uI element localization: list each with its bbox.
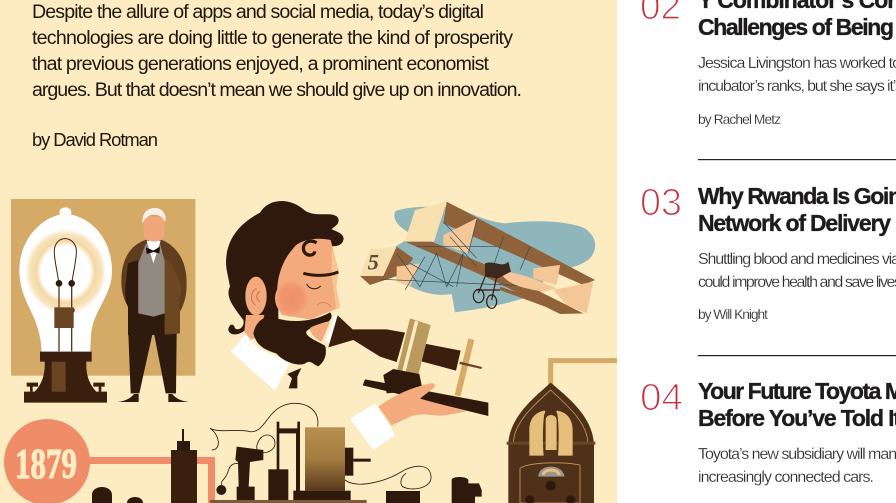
telephone drum: [397, 318, 461, 377]
headline: [698, 378, 896, 431]
Edison figure: [117, 208, 189, 402]
summary: increasingly connected cars.: [698, 469, 874, 486]
tall battery column: [171, 429, 197, 503]
undercarriage: [473, 277, 500, 308]
lightbulb base: [24, 352, 107, 403]
eye and brow: [303, 272, 338, 289]
number 03: 03: [640, 182, 682, 224]
sky cloud: [389, 207, 595, 312]
intro paragraph: [32, 1, 522, 101]
biplane: 5: [368, 249, 379, 274]
machinery: telegraph set: [210, 403, 431, 503]
top wing: [443, 202, 595, 285]
left panel background: [0, 0, 617, 503]
headline: Challenges of Being: [698, 14, 894, 40]
summary: [698, 446, 896, 486]
shirt cuff: [350, 403, 395, 450]
summary: Jessica Livingston has worked to: [698, 55, 896, 72]
intro paragraph: Despite the allure of apps and social media, today’s digital: [32, 1, 484, 23]
number 04: 04: [640, 377, 683, 419]
telephone base: [363, 369, 488, 416]
summary: could improve health and save lives: [698, 274, 896, 291]
right panel: article 02: [640, 0, 896, 127]
byline: by Will Knight: [698, 307, 768, 322]
collar: [231, 333, 290, 391]
rigging: [382, 220, 543, 290]
antique radio: [507, 383, 595, 503]
1879 date marker: 1879: [15, 442, 77, 488]
illustration: inventor with telephone: [210, 201, 617, 503]
headline: Before You’ve Told It: [698, 405, 896, 431]
headline: [698, 0, 896, 40]
telephone horn: [325, 312, 405, 362]
intro paragraph: that previous generations enjoyed, a prominent economist: [32, 53, 490, 75]
dark instrument at bottom left: [92, 487, 143, 503]
tail box: [359, 247, 397, 277]
headline: Why Rwanda Is Goin: [698, 183, 896, 209]
face: [275, 239, 340, 319]
byline: David Rotman: by David Rotman: [32, 129, 158, 150]
hand: [378, 383, 467, 425]
fuselage: [500, 272, 557, 292]
summary: [698, 55, 896, 95]
illustration: lightbulb and Edison: [11, 199, 195, 403]
neck and ear: [244, 277, 267, 340]
lower wing: [405, 242, 583, 314]
right panel: article 04: [640, 377, 896, 486]
icon: lightbulb: [19, 207, 112, 352]
right panel: article 03: [640, 182, 896, 322]
bow tie: [287, 368, 301, 388]
telephone post: [455, 338, 482, 397]
small dark instruments: [386, 477, 482, 503]
hair: [226, 201, 344, 338]
intro paragraph: technologies are doing little to generate the kind of prosperity: [32, 27, 513, 49]
intro paragraph: argues. But that doesn’t mean we should give up on innovation.: [32, 79, 522, 101]
headline: Network of Delivery: [698, 210, 891, 236]
summary: [698, 251, 896, 291]
1879 date marker: [4, 419, 215, 503]
radio cable: [551, 361, 617, 385]
byline: by Rachel Metz: [698, 112, 781, 127]
tan backdrop square: [11, 199, 195, 376]
summary: Shuttling blood and medicines via: [698, 251, 896, 268]
biplane: [359, 202, 595, 314]
headline: [698, 183, 896, 236]
beard: [253, 312, 332, 366]
hair curl: [303, 241, 317, 255]
